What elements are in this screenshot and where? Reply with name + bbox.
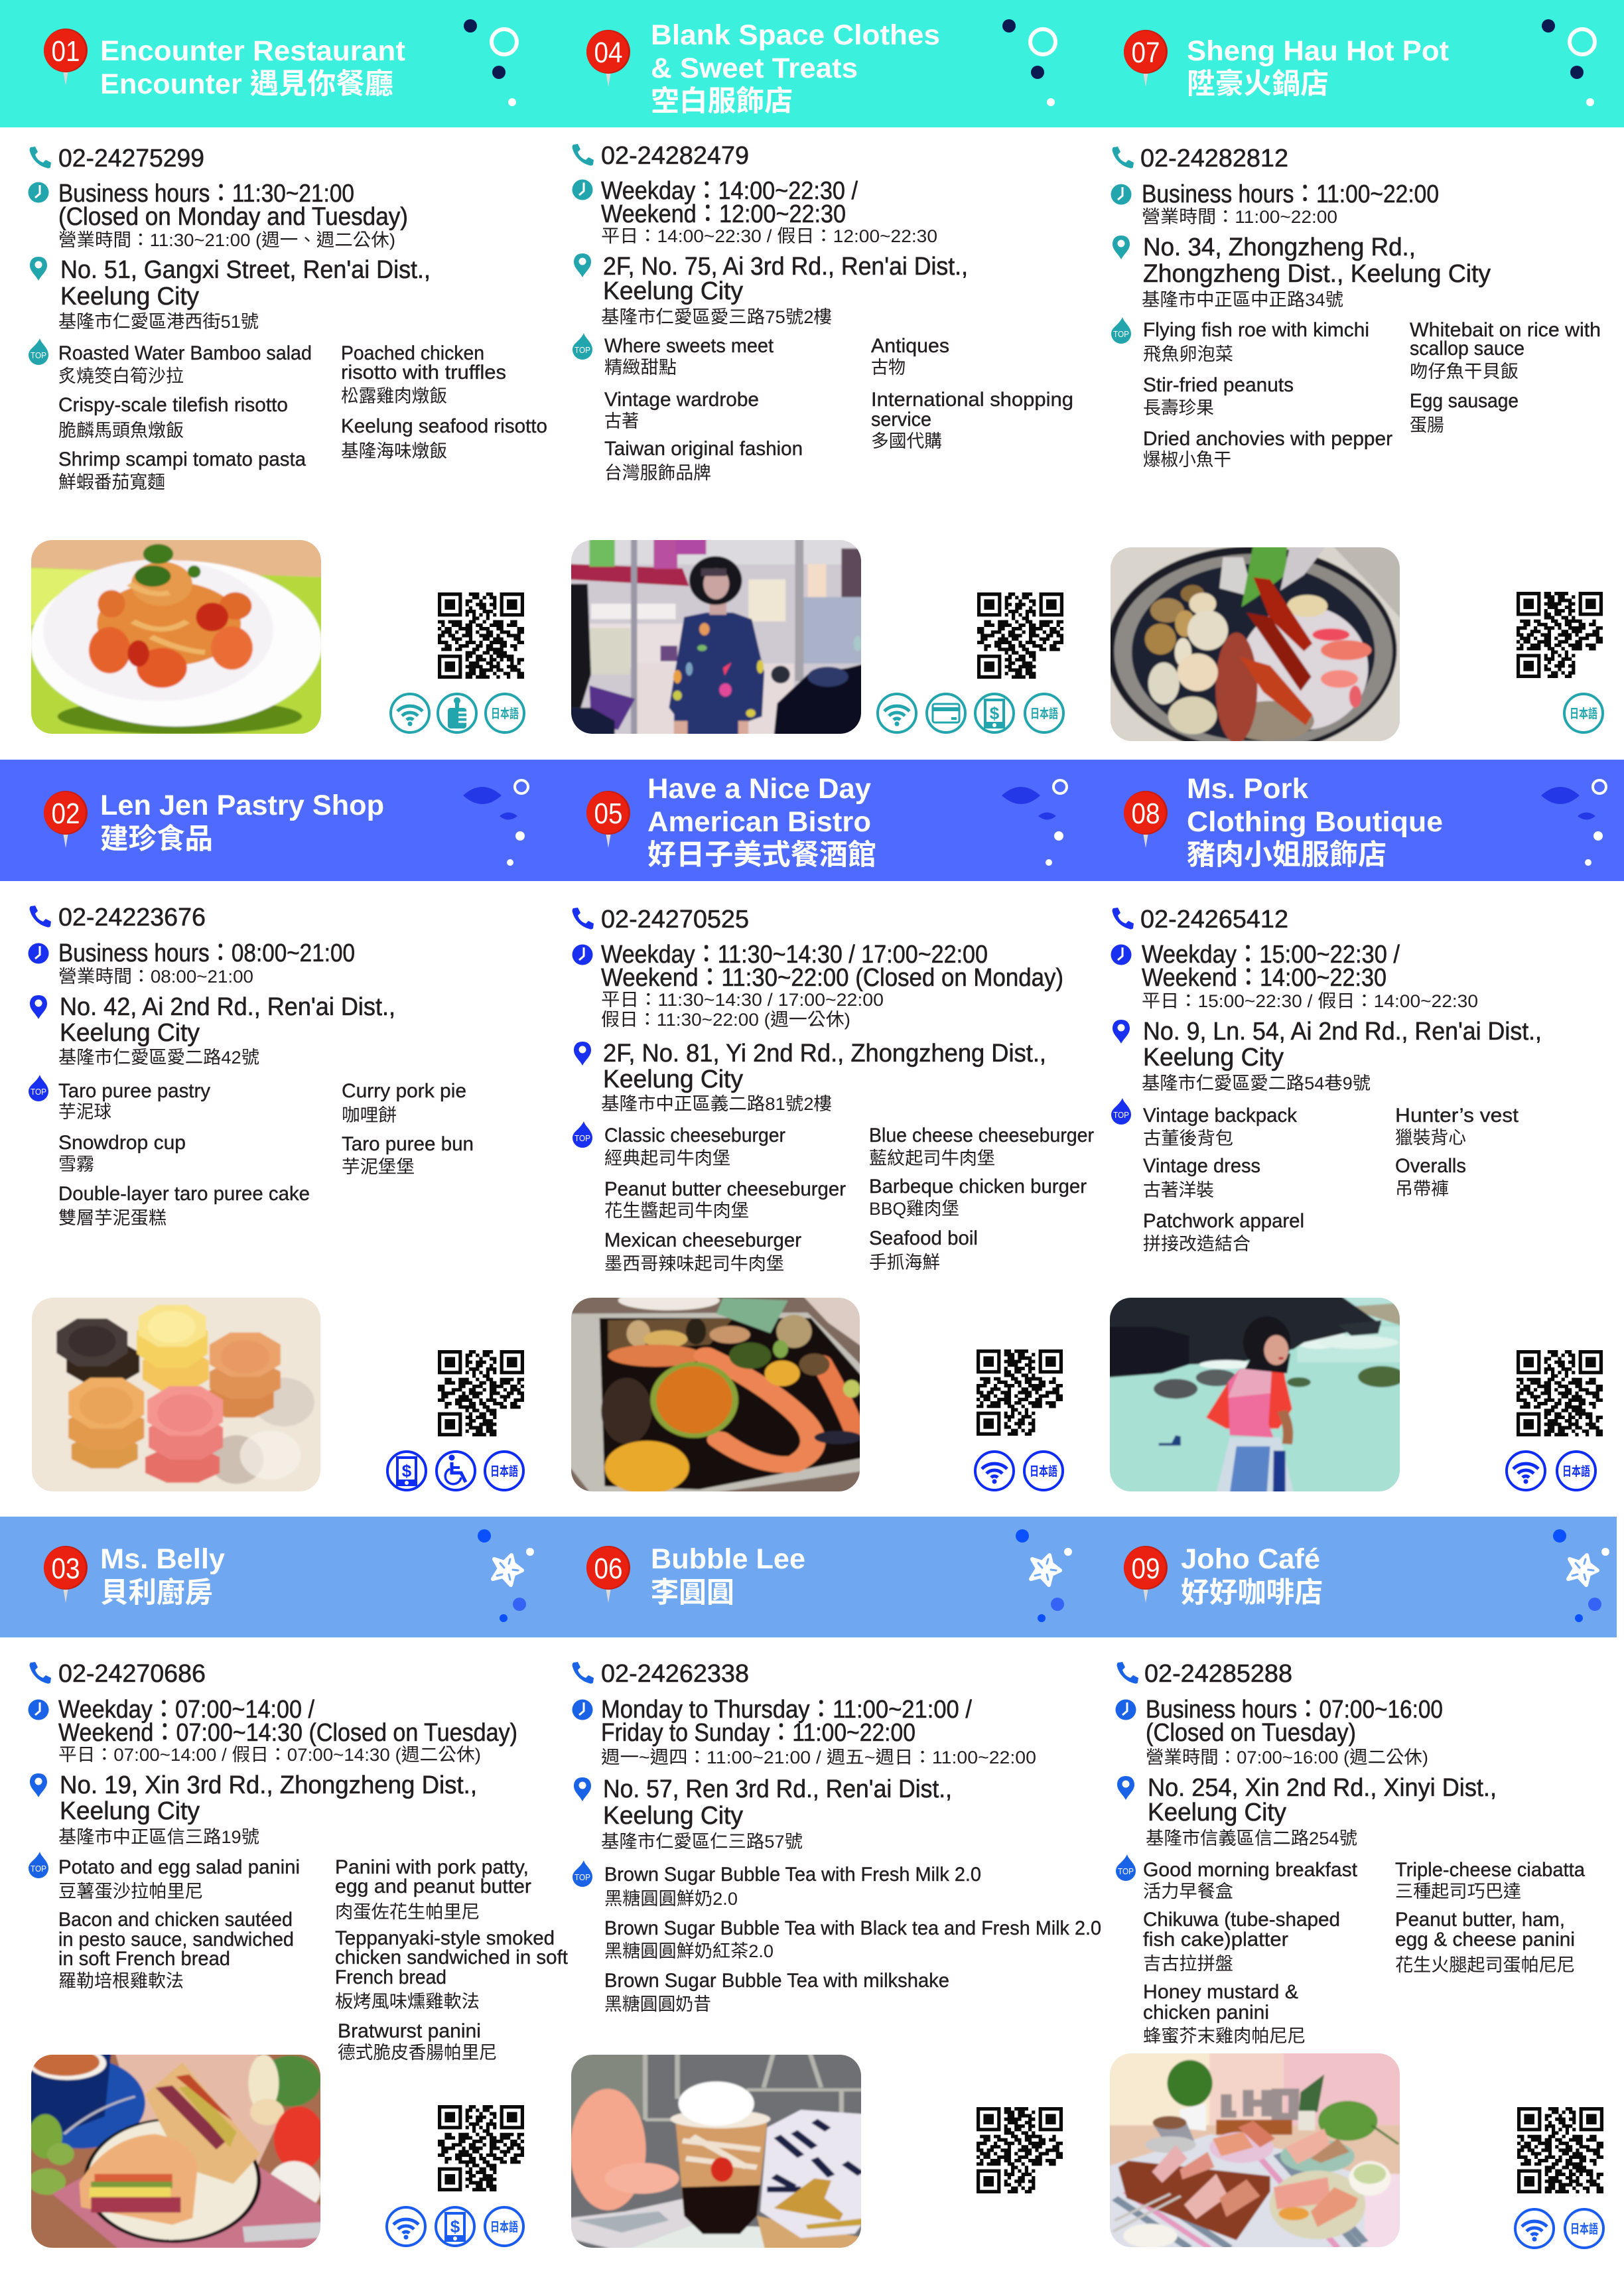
address [574,1775,952,1852]
address: 2F, No. 75, Ai 3rd Rd., Ren'ai Dist., [603,253,968,281]
top menu items: Triple-cheese ciabatta [1395,1859,1585,1881]
qr code [438,1350,524,1436]
heading: Ms. Pork [1124,773,1443,871]
heading: Blank Space: & Sweet Treats [651,52,858,84]
top menu items: 花生醬起司牛肉堡 [604,1201,749,1221]
top menu items: 三種起司巧巴達 [1395,1882,1521,1901]
business hours: 平日：11:30~14:30 / 17:00~22:00 [601,990,884,1010]
phone: 02-24270525 [601,906,749,933]
top menu items: 花生火腿起司蛋帕尼尼 [1395,1955,1575,1975]
service icons [1515,2209,1603,2248]
business hours [572,1696,1036,1767]
heading: Ms. Belly: 03 [52,1552,80,1585]
business hours [572,177,937,246]
business hours: 假日：11:30~22:00 (週一公休) [601,1010,850,1030]
photo: panini sandwich [31,2055,320,2248]
photo: bubble tea [567,2051,865,2251]
top menu items: Taro puree bun [342,1133,474,1155]
top menu items: Teppanyaki-style smoked [335,1927,555,1949]
top menu items: 蛋腸 [1410,415,1444,435]
top menu items: 黑糖圓圓奶昔 [604,1994,711,2014]
top menu items [1116,1854,1585,2046]
top menu items: Barbeque chicken burger [869,1176,1087,1198]
business hours: 營業時間：11:30~21:00 (週一、週二公休) [58,230,395,250]
phone: 02-24282812 [1140,145,1288,172]
service icons [975,1452,1063,1490]
heading: Ms. Belly: Ms. Belly [100,1543,225,1575]
photo: taro pastries [27,1294,326,1494]
heading: Blank Space: Blank Space Clothes [651,19,940,51]
top menu items: Panini with pork patty, [335,1856,529,1878]
top menu items: Bratwurst panini [338,2020,481,2042]
business hours: Weekday：15:00~22:30 / [1142,941,1400,969]
panel: 05 Have a Nice Day [567,773,1094,1494]
heading: Ms. Pork: 豬肉小姐服飾店 [1187,839,1387,871]
heading: Sheng Hau Hot Pot: Sheng Hau Hot Pot [1187,35,1449,67]
top menu items: 吉古拉拼盤 [1143,1954,1233,1974]
panel: 02 Len Jen Pastry Shop [27,780,528,1494]
heading: Have a Nice Day: Have a Nice Day [647,773,871,805]
heading: Bubble Lee [586,1543,805,1609]
top menu items: Potato and egg salad panini [58,1856,300,1878]
panel: 01 Encounter Restaurant [25,19,547,736]
heading: Blank Space [586,19,940,117]
top menu items: Shrimp scampi tomato pasta [58,448,306,470]
photo: man in printed jacket [567,537,866,736]
top menu items: 經典起司牛肉堡 [604,1148,730,1168]
top menu items: 活力早餐盒 [1143,1882,1233,1901]
heading: Encounter Restaurant [44,29,405,100]
business hours: 營業時間：08:00~21:00 [58,967,253,987]
top menu items: egg & cheese panini [1395,1929,1575,1951]
top menu items: 古著 [604,411,639,431]
top menu items [1111,317,1601,470]
top menu items: French bread [335,1966,446,1988]
heading: Have a Nice Day [586,773,876,871]
top menu items: 墨西哥辣味起司牛肉堡 [604,1254,784,1274]
top menu items: Curry pork pie [342,1080,466,1102]
business hours [572,941,1063,1030]
decorative star [1553,1529,1609,1622]
photo: joho cafe table [1105,2050,1405,2250]
top menu items: Roasted Water Bamboo salad [58,342,312,364]
business hours: Weekday：14:00~22:30 / [601,177,858,205]
address: No. 9, Ln. 54, Ai 2nd Rd., Ren'ai Dist., [1143,1018,1542,1046]
phone: 02-24270686 [58,1660,206,1688]
top menu items: Overalls [1395,1155,1466,1177]
top menu items: 黑糖圓圓鮮奶2.0 [604,1889,738,1909]
top menu items: Patchwork apparel [1143,1210,1304,1232]
service icons [391,694,524,732]
qr code [977,2107,1063,2193]
top menu items [29,1075,474,1228]
top menu items: 炙燒筊白筍沙拉 [58,366,184,386]
address [574,1040,1046,1114]
top menu items: Classic cheeseburger [604,1125,785,1146]
decorative star [1016,1529,1072,1622]
header band row 3 [0,1517,1617,1637]
top menu items: Vintage backpack [1143,1105,1298,1127]
top menu items: Poached chicken [341,342,484,364]
top menu items: International shopping [871,389,1073,411]
business hours: 週一~週四：11:00~21:00 / 週五~週日：11:00~22:00 [601,1748,1036,1767]
top menu items: Vintage wardrobe [604,389,759,411]
business hours [1111,941,1478,1011]
phone: 02-24282479 [601,142,749,170]
decorative shapes [463,780,528,866]
top menu items: risotto with truffles [341,362,506,383]
top menu items: Taiwan original fashion [604,438,803,460]
top menu items: 古著洋裝 [1143,1180,1214,1200]
heading: Sheng Hau Hot Pot: 07 [1132,36,1160,69]
top menu items: Where sweets meet [604,335,774,357]
qr code [977,592,1063,679]
business hours: Weekday：07:00~14:00 / [58,1696,314,1724]
top menu items: egg and peanut butter [335,1876,531,1897]
top menu items: 手抓海鮮 [869,1253,940,1273]
top menu items: Honey mustard & [1143,1981,1298,2003]
top menu items: 拼接改造結合 [1143,1234,1251,1254]
address: Keelung City [603,1066,743,1093]
header band row 1 [0,0,1624,127]
heading: Joho Cafe: 好好咖啡店 [1181,1577,1323,1609]
photo: seafood boil [567,1290,865,1494]
service icons [878,694,1063,732]
top menu items: Brown Sugar Bubble Tea with milkshake [604,1970,949,1992]
top menu items: 古物 [871,358,906,378]
address: 基隆市仁愛區仁三路57號 [601,1832,803,1852]
top menu items: 芋泥球 [58,1102,111,1122]
business hours: Business hours：08:00~21:00 [58,939,355,967]
phone: 02-24223676 [58,904,206,931]
phone: 02-24275299 [58,145,204,172]
top menu items: 吻仔魚干貝飯 [1410,362,1519,381]
top menu items: Blue cheese cheeseburger [869,1125,1094,1146]
top menu items: chicken panini [1143,2002,1269,2024]
top menu items: 精緻甜點 [604,358,677,378]
top menu items: 板烤風味燻雞軟法 [335,1992,480,2012]
address: 基隆市中正區義二路81號2樓 [601,1094,832,1114]
decorative dots [1002,19,1055,106]
business hours: Monday to Thursday：11:00~21:00 / [601,1696,972,1724]
top menu items: 鮮蝦番茄寬麵 [58,472,165,492]
address [1113,234,1491,310]
business hours [1111,180,1439,227]
business hours: Weekend：07:00~14:30 (Closed on Tuesday) [58,1719,517,1747]
address: Keelung City [603,277,743,305]
heading: Ms. Pork: Ms. Pork [1187,773,1308,805]
top menu items: 咖哩餅 [342,1105,397,1125]
qr code [438,592,524,679]
address: No. 42, Ai 2nd Rd., Ren'ai Dist., [60,993,395,1021]
heading: Len Jen Pastry Shop [44,790,384,855]
panel: 09 Joho Cafe [1105,1529,1609,2250]
business hours: 營業時間：07:00~16:00 (週二公休) [1146,1748,1428,1767]
top menu items: Good morning breakfast [1143,1859,1358,1881]
business hours [28,939,355,987]
top menu items: Taro puree pastry [58,1080,210,1102]
top menu items: 雪霧 [58,1154,94,1174]
address: Keelung City [1143,1044,1284,1071]
top menu items: Snowdrop cup [58,1132,186,1154]
top menu items: 獵裝背心 [1395,1128,1466,1148]
top menu items: Crispy-scale tilefish risotto [58,394,288,416]
heading: Bubble Lee: 李圓圓 [651,1577,734,1609]
address: No. 19, Xin 3rd Rd., Zhongzheng Dist., [60,1771,477,1799]
qr code [1517,2107,1603,2193]
business hours: Friday to Sunday：11:00~22:00 [601,1719,915,1747]
business hours [28,1696,517,1765]
heading: Joho Cafe: 09 [1132,1552,1160,1585]
business hours: Weekend：11:30~22:00 (Closed on Monday) [601,964,1063,992]
top menu items: chicken sandwiched in soft [335,1947,569,1968]
heading: Sheng Hau Hot Pot: 陞豪火鍋店 [1187,68,1329,100]
top menu items: Bacon and chicken sautéed [58,1909,293,1931]
business hours: 平日：14:00~22:30 / 假日：12:00~22:30 [601,226,937,246]
address: Keelung City [603,1802,743,1830]
address [30,256,431,332]
heading: Blank Space: 空白服飾店 [651,86,793,117]
heading: Blank Space: 04 [594,36,622,69]
top menu items: scallop sauce [1410,338,1524,360]
address: No. 51, Gangxi Street, Ren'ai Dist., [60,256,431,284]
address: 基隆市仁愛區港西街51號 [58,312,259,332]
top menu items: Mexican cheeseburger [604,1229,801,1251]
heading: Ms. Pork: Clothing Boutique [1187,806,1443,838]
address: 基隆市信義區信二路254號 [1146,1828,1357,1848]
qr code [438,2105,524,2191]
heading: Ms. Belly: 貝利廚房 [100,1577,213,1609]
heading: Sheng Hau Hot Pot [1124,30,1449,100]
top menu items: 蜂蜜芥末雞肉帕尼尼 [1143,2026,1306,2046]
heading: Ms. Pork: 08 [1132,797,1160,830]
top menu items: 吊帶褲 [1395,1179,1449,1199]
address: Zhongzheng Dist., Keelung City [1143,260,1491,288]
decorative shapes [1541,780,1606,866]
business hours [28,180,408,250]
panel: 07 Sheng Hau Hot Pot [1105,19,1603,754]
decorative dots [464,19,517,106]
heading: Encounter Restaurant: Encounter 遇見你餐廳 [100,68,393,100]
top menu items: Flying fish roe with kimchi [1143,319,1369,341]
top menu items [573,333,1073,483]
top menu items: BBQ雞肉堡 [869,1199,959,1219]
top menu items: 飛魚卵泡菜 [1143,344,1233,364]
decorative star [478,1529,534,1622]
service icons [1564,694,1603,732]
address: No. 254, Xin 2nd Rd., Xinyi Dist., [1148,1774,1497,1802]
photo: girl by the sea [1105,1294,1405,1494]
top menu items: 台灣服飾品牌 [604,463,711,483]
top menu items [573,1121,1094,1274]
heading: Encounter Restaurant: 01 [52,35,80,68]
top menu items: 德式脆皮香腸帕里尼 [338,2043,497,2063]
address: No. 57, Ren 3rd Rd., Ren'ai Dist., [603,1775,952,1803]
top menu items: Brown Sugar Bubble Tea with Fresh Milk 2.0 [604,1864,981,1886]
service icons [387,2207,523,2246]
business hours: Weekday：11:30~14:30 / 17:00~22:00 [601,941,988,969]
heading: Bubble Lee: 06 [594,1552,622,1585]
top menu items: Seafood boil [869,1227,978,1249]
photo: shrimp pasta [25,537,327,736]
top menu items: 多國代購 [871,431,942,451]
top menu items: 脆麟馬頭魚燉飯 [58,421,184,441]
address: Keelung City [60,1797,200,1825]
business hours: 平日：07:00~14:00 / 假日：07:00~14:30 (週二公休) [58,1745,481,1765]
address: Keelung City [60,283,199,310]
panel: 08 Ms. Pork [1105,773,1606,1494]
address [1117,1774,1497,1848]
top menu items: 長壽珍果 [1143,398,1214,418]
top menu items: 豆薯蛋沙拉帕里尼 [58,1882,203,1901]
business hours: (Closed on Tuesday) [1146,1719,1356,1747]
address: Keelung City [60,1019,200,1047]
top menu items [573,1860,1101,2014]
top menu items [29,338,547,492]
top menu items: Antiques [871,335,949,357]
qr code [1517,1350,1603,1436]
top menu items: service [871,409,931,431]
top menu items: 松露雞肉燉飯 [341,386,447,406]
business hours: Business hours：11:30~21:00 [58,180,354,208]
heading: Len Jen Pastry Shop: Len Jen Pastry Shop [100,790,384,821]
top menu items: Vintage dress [1143,1155,1260,1177]
phone: 02-24265412 [1140,906,1288,933]
top menu items: Egg sausage [1410,390,1519,412]
top menu items: 肉蛋佐花生帕里尼 [335,1902,480,1922]
top menu items [29,1852,569,2063]
address [30,993,395,1067]
top menu items: 羅勒培根雞軟法 [58,1971,184,1991]
address: 基隆市仁愛區愛三路75號2樓 [601,307,832,327]
top menu items: 基隆海味燉飯 [341,441,447,461]
business hours: 營業時間：11:00~22:00 [1142,207,1337,227]
qr code [1517,592,1603,678]
qr code [977,1349,1063,1436]
top menu items: Peanut butter cheeseburger [604,1178,846,1200]
top menu items: fish cake)platter [1143,1929,1288,1951]
top menu items: in soft French bread [58,1948,230,1970]
top menu items: Peanut butter, ham, [1395,1909,1565,1931]
service icons [1507,1452,1595,1490]
business hours: 平日：15:00~22:30 / 假日：14:00~22:30 [1142,991,1478,1011]
address: Keelung City [1148,1799,1286,1826]
top menu items: 黑糖圓圓鮮奶紅茶2.0 [604,1941,774,1961]
address [574,253,968,327]
top menu items: 芋泥堡堡 [342,1157,415,1177]
top menu items: Brown Sugar Bubble Tea with Black tea and Fresh Milk 2.0 [604,1917,1101,1939]
heading: Have a Nice Day: American Bistro [647,806,871,838]
top menu items: 古董後背包 [1143,1129,1233,1148]
top menu items: 爆椒小魚干 [1143,450,1231,470]
top menu items: Whitebait on rice with [1410,319,1601,341]
heading: Have a Nice Day: 05 [594,797,622,830]
business hours: Weekend：12:00~22:30 [601,200,846,228]
address [30,1771,477,1847]
phone: 02-24262338 [601,1660,749,1688]
phone: 02-24285288 [1144,1660,1292,1688]
business hours: (Closed on Monday and Tuesday) [58,203,408,231]
heading: Encounter Restaurant: Encounter Restaurant [100,35,405,67]
top menu items: Double-layer taro puree cake [58,1183,310,1205]
heading: Joho Cafe [1124,1543,1323,1609]
top menu items: Dried anchovies with pepper [1143,428,1392,450]
business hours: Business hours：07:00~16:00 [1146,1696,1443,1724]
top menu items: 雙層芋泥蛋糕 [58,1208,167,1228]
address: No. 34, Zhongzheng Rd., [1143,234,1416,261]
address: 基隆市中正區中正路34號 [1142,290,1343,310]
panel: 06 Bubble Lee [567,1529,1101,2251]
service icons [387,1452,523,1490]
address: 基隆市中正區信三路19號 [58,1827,259,1847]
photo: hot pot seafood [1111,547,1400,741]
top menu items: Keelung seafood risotto [341,415,547,437]
heading: Len Jen Pastry Shop: 02 [52,797,80,830]
address: 基隆市仁愛區愛二路42號 [58,1048,259,1067]
business hours: Business hours：11:00~22:00 [1142,180,1439,208]
top menu items: Hunter’s vest [1395,1105,1519,1127]
top menu items [1111,1098,1519,1254]
heading: Joho Cafe: Joho Café [1181,1543,1320,1575]
decorative shapes [1002,780,1067,866]
top menu items: Chikuwa (tube-shaped [1143,1909,1340,1931]
heading: Bubble Lee: Bubble Lee [651,1543,805,1575]
top menu items: Stir-fried peanuts [1143,374,1294,396]
top menu items: in pesto sauce, sandwiched [58,1929,294,1951]
business hours [1116,1696,1443,1767]
address: 基隆市仁愛區愛二路54巷9號 [1142,1073,1371,1093]
heading: Have a Nice Day: 好日子美式餐酒館 [647,839,876,871]
panel: 04 Blank Space [567,19,1073,736]
address: 2F, No. 81, Yi 2nd Rd., Zhongzheng Dist., [603,1040,1046,1067]
heading: Ms. Belly [44,1543,225,1609]
business hours: Weekend：14:00~22:30 [1142,964,1387,992]
decorative dots [1542,19,1595,106]
header band row 2 [0,760,1624,881]
heading: Len Jen Pastry Shop: 建珍食品 [100,823,213,855]
panel: 03 Ms. Belly [17,1529,569,2251]
address [1113,1018,1542,1093]
top menu items: 藍紋起司牛肉堡 [869,1148,995,1168]
